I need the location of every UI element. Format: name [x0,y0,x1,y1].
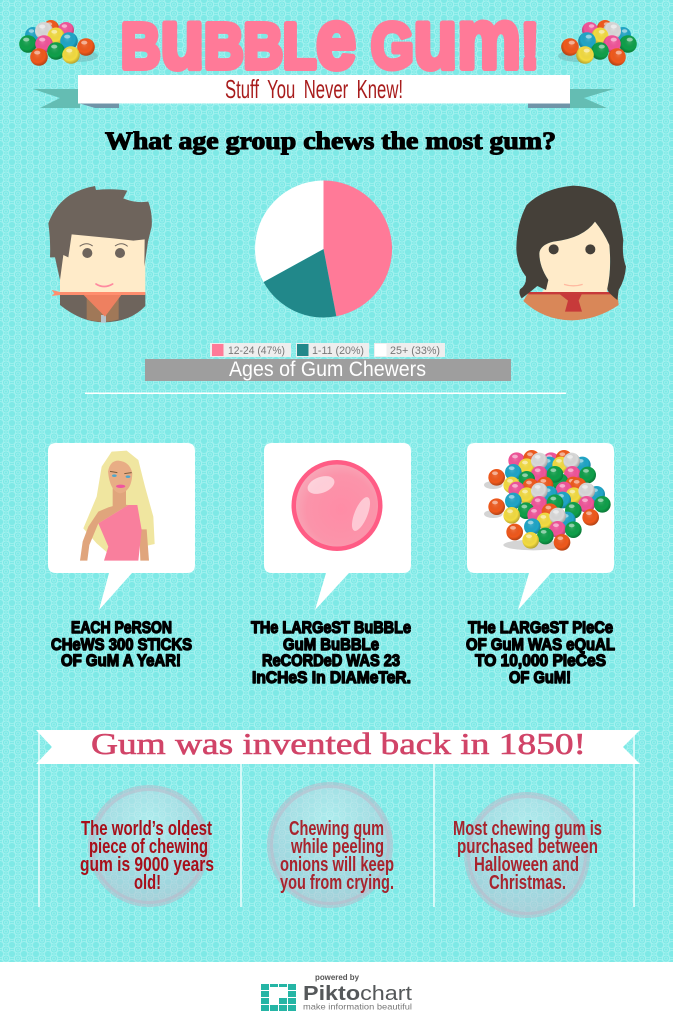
banner: gum invented: Gum was invented back in 1850! [91,726,586,761]
heading: age group question: What age group chews the most gum? [105,128,556,155]
caption: largest piece [466,618,615,687]
icon: gumball cluster right [558,20,637,66]
caption: largest piece: THe LARGeST PIeCe [468,618,613,637]
fact: peeling onions: onions will keep [280,854,394,876]
chart legend [210,343,445,357]
caption: largest bubble: THe LARGeST BuBBLe [251,618,411,637]
fact: Halloween and Christmas: purchased between [457,836,598,858]
fact: peeling onions [270,785,394,905]
fact: oldest gum: piece of chewing [89,836,208,858]
caption: each person: EACH PeRSON [71,618,172,637]
footer: Piktochart logo: make information beautiful [303,1002,412,1012]
fact: Halloween and Christmas: Halloween and [474,854,579,876]
fact: Halloween and Christmas: Christmas. [489,872,566,894]
chart legend: 1-11 (20%) [312,345,364,357]
caption: largest piece: OF GuM! [509,668,571,687]
caption: largest bubble: InCHeS In DIAMeTeR. [252,668,411,687]
icon: blonde woman [80,451,155,561]
panel: card person [48,443,195,610]
icon: gumball pile [484,450,611,551]
caption: each person [51,618,192,670]
fact: peeling onions: you from crying. [280,872,394,894]
fact: oldest gum: The world’s oldest [81,818,212,840]
caption: largest piece: OF GuM WAS eQuAL [466,635,615,654]
fact: oldest gum: gum is 9000 years [80,854,214,876]
ribbon banner [33,74,614,108]
caption: largest bubble: ReCORDeD WAS 23 [262,651,400,670]
chart title bar: Ages of Gum Chewers [229,358,426,381]
banner: gum invented [36,726,640,764]
fact: oldest gum: old! [134,872,161,894]
subtitle: Stuff You Never Knew! [225,74,403,104]
icon: boy avatar [48,186,152,323]
chart legend: 12-24 (47%) [228,345,285,357]
fact: Halloween and Christmas: Most chewing gum is [453,818,602,840]
pie chart: ages of gum chewers [255,180,392,318]
caption: each person: OF GuM A YeAR! [61,651,181,670]
chart legend: 25+ (33%) [390,345,440,357]
fact: Halloween and Christmas [453,795,602,915]
fact: peeling onions: Chewing gum [289,818,384,840]
fact: peeling onions: while peeling [290,836,384,858]
footer: Piktochart logo: powered by [315,973,360,982]
footer: Piktochart logo [261,973,413,1012]
footer: Piktochart logo: Pikto chart [303,983,413,1005]
chart title bar [145,358,511,381]
panel: card gumball pile [467,443,614,610]
caption: largest bubble [251,618,411,687]
icon: girl avatar [516,186,626,320]
panel: card bubble [264,443,411,610]
caption: each person: CHeWS 300 STICKS [51,635,192,654]
footer background [0,962,673,1024]
caption: largest piece: TO 10,000 PIeCeS [475,651,606,670]
icon: gumball cluster left [19,20,98,66]
fact: oldest gum [80,788,214,904]
caption: largest bubble: GuM BuBBLe [283,635,379,654]
icon: pink bubble [292,460,382,551]
